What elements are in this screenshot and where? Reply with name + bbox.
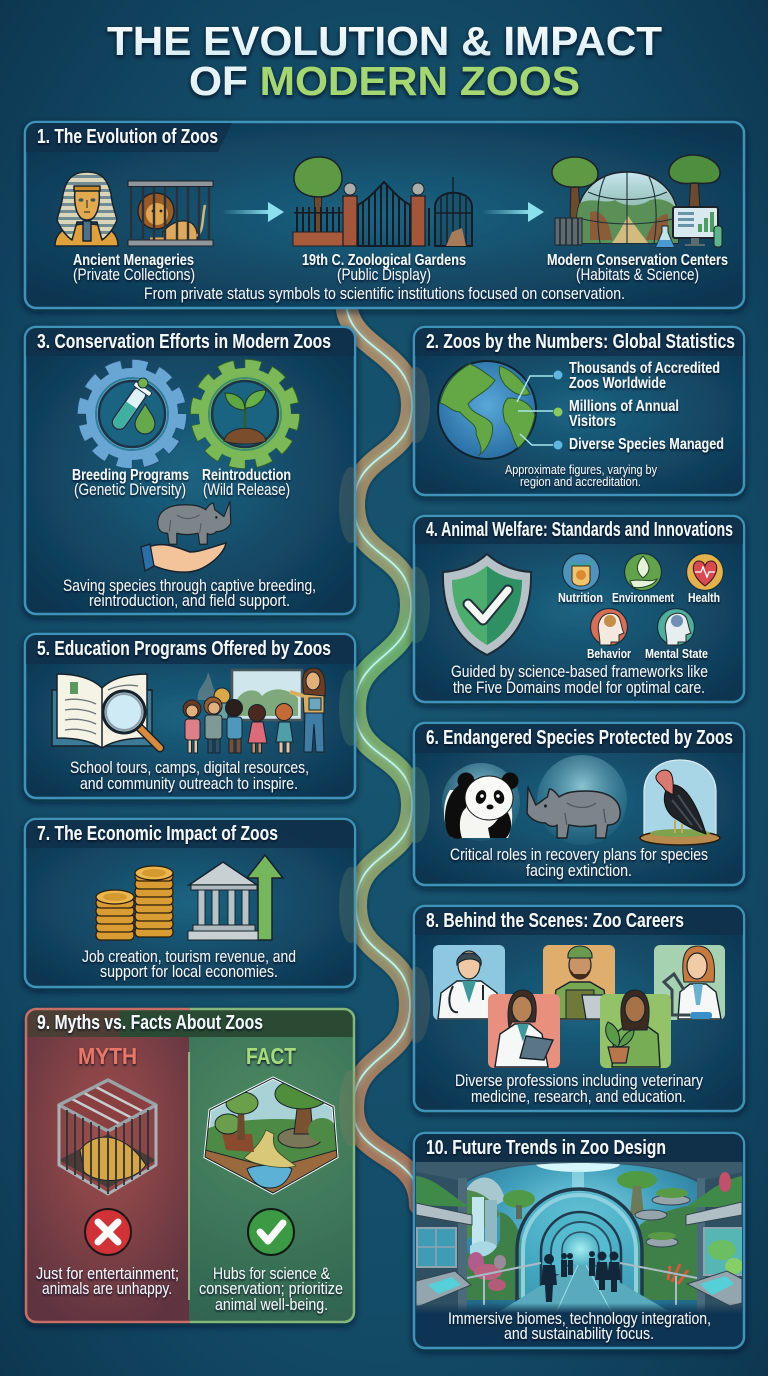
figure: researcher [654,945,725,1020]
arrow 2 [482,202,544,222]
icon: rhino on hand [141,501,231,572]
welfare domain labels: Environment [612,591,675,605]
callout lines [517,370,562,450]
labels: reintroduction [202,467,291,499]
labels: breeding programs: (Genetic Diversity) [74,481,186,499]
labels: breeding programs: Breeding Programs [72,467,189,484]
icon: mental state [658,608,694,646]
icon: check mark [248,1209,294,1255]
welfare domain labels: Nutrition [558,591,603,605]
labels: zoological gardens: 19th C. Zoological Gardens [302,252,466,269]
icon: health [686,554,724,590]
heading 7: 7. The Economic Impact of Zoos [37,823,278,845]
icon: caged lion [128,181,213,246]
labels: conservation centers: (Habitats & Science) [576,266,699,284]
panel 4: Animal Welfare [414,516,744,702]
caption 10 [448,1310,711,1343]
icon: cage [59,1080,156,1194]
labels: breeding programs [72,467,189,499]
icon: coin stacks [96,866,173,940]
panel 7: Economic Impact [25,819,355,987]
caption 5: and community outreach to inspire. [80,775,298,793]
welfare domain labels: Mental State [645,647,708,661]
caption 7: support for local economies. [100,963,278,981]
caption 5 [70,759,309,793]
scene: immersive biome tunnel [416,1156,744,1313]
river overlay glow at panel edges [339,367,430,1146]
icon: nutrition [562,554,600,590]
icon: rhino [527,755,627,845]
icon: X mark [85,1209,131,1255]
title: OF MODERN ZOOS [189,58,580,104]
panel 10: Future Trends [414,1133,744,1348]
stats list: Visitors [569,413,616,430]
panel 8: Zoo Careers [414,906,744,1111]
labels: ancient menageries: Ancient Menageries [73,252,194,269]
icon: terrarium [205,1078,337,1193]
myth text: Just for entertainment; [36,1265,179,1283]
stats list: Diverse Species Managed [569,436,724,453]
panel 9: Myths vs. Facts [25,1008,355,1323]
heading 10: 10. Future Trends in Zoo Design [426,1137,666,1159]
stats list [569,360,724,453]
figure: keeper [543,945,615,1020]
caption 5: School tours, camps, digital resources, [70,759,309,777]
fact text [199,1265,343,1314]
caption 8: Diverse professions including veterinary [455,1072,704,1090]
myth text [36,1265,179,1298]
stats list: Millions of Annual [569,398,679,415]
caption 4: the Five Domains model for optimal care. [453,679,705,697]
caption 7: Job creation, tourism revenue, and [82,948,296,966]
heading bar 10 [415,1134,743,1162]
heading bar [26,1009,354,1037]
heading 3: 3. Conservation Efforts in Modern Zoos [37,331,331,353]
footnote 2: region and accreditation. [520,474,641,489]
stats list: Zoos Worldwide [569,375,666,392]
heading 5: 5. Education Programs Offered by Zoos [37,638,331,660]
welfare domain labels: Health [688,591,720,605]
stats list: Thousands of Accredited [569,360,720,377]
panel 3: Conservation Efforts [25,327,355,614]
icon: shield [443,554,531,655]
caption 3 [63,577,316,610]
myth text: animals are unhappy. [42,1280,172,1298]
panel 2: Zoos by the Numbers [414,327,744,495]
panel 6: Endangered Species [414,723,744,885]
label fact: FACT [246,1043,296,1069]
icon: pharaoh [55,172,118,246]
fact text: animal well-being. [215,1296,328,1314]
figure: veterinarian [433,945,505,1020]
label myth: MYTH [78,1043,137,1069]
tunnel [517,1189,642,1300]
footnote 2: Approximate figures, varying by [505,462,657,477]
welfare domain labels [558,591,720,661]
icon: green gear with seedling [198,367,292,461]
icon: panda [442,763,520,841]
caption 4: Guided by science-based frameworks like [451,663,708,681]
caption 8: medicine, research, and education. [471,1088,686,1106]
panel 1: The Evolution of Zoos [25,122,744,308]
icon: environment [624,554,662,590]
caption 10: and sustainability focus. [504,1325,654,1343]
labels: ancient menageries [73,252,195,284]
winding river connector [346,300,420,1205]
caption 4 [451,663,708,697]
caption 7 [82,948,296,981]
caption 10: Immersive biomes, technology integration, [448,1310,711,1328]
icon: open book with magnifier [52,674,160,748]
icon: globe [438,361,536,459]
caption 1: From private status symbols to scientific institutions focused on conservation. [144,285,625,303]
caption 3: Saving species through captive breeding, [63,577,316,595]
labels: zoological gardens: (Public Display) [337,266,431,284]
caption 6 [450,846,708,880]
heading 8: 8. Behind the Scenes: Zoo Careers [426,910,684,932]
icon: conservation center [552,155,722,247]
fact text: Hubs for science & [213,1265,330,1283]
labels: conservation centers [547,252,728,284]
caption 3: reintroduction, and field support. [89,592,290,610]
panel frame [26,1009,354,1322]
labels: zoological gardens [302,252,466,284]
labels: reintroduction: (Wild Release) [203,481,290,499]
caption 6: facing extinction. [526,862,632,880]
labels: reintroduction: Reintroduction [202,467,291,484]
heading 1: 1. The Evolution of Zoos [37,126,218,148]
caption 8 [455,1072,704,1106]
myth half [26,1037,189,1322]
caption 6: Critical roles in recovery plans for species [450,846,708,864]
footnote 2 [505,462,657,489]
fact text: conservation; prioritize [199,1280,343,1298]
welfare domain labels: Behavior [587,647,631,661]
labels: ancient menageries: (Private Collections) [73,266,195,284]
panel 5: Education Programs [25,634,355,798]
icon: vulture under glass [640,760,720,845]
icon: children with teacher [183,668,325,753]
icon: bank with growth arrow [188,855,283,940]
icon: zoological gate [293,157,472,246]
icon: behavior [590,608,628,646]
figure: horticulturist [600,990,671,1068]
title [107,18,662,104]
arrow 1 [222,202,284,222]
figure: veterinary assistant with tablet [488,990,560,1068]
title: THE EVOLUTION & IMPACT [107,18,662,64]
heading 9: 9. Myths vs. Facts About Zoos [37,1012,263,1034]
icon: blue gear with test tube [85,367,179,461]
